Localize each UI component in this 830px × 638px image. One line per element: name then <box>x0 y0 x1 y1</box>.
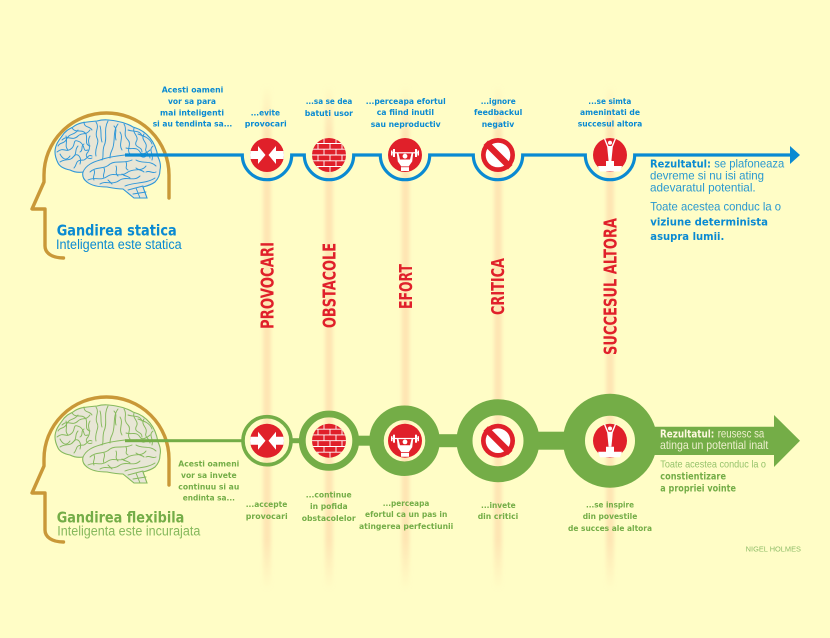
credit: NIGEL HOLMES <box>746 547 801 554</box>
caption: effort as a step: ...perceapa <box>383 498 429 508</box>
caption: learn from criticism: ...invete <box>481 500 516 510</box>
vertical label: CRITICA: CRITICA <box>489 258 509 315</box>
result text: fixed mindset: Toate acestea conduc la o <box>650 200 781 214</box>
caption: avoid challenges <box>245 108 287 129</box>
result text: fixed mindset: viziune determinista <box>650 216 768 229</box>
caption: persist through obstacles <box>302 490 357 523</box>
icon: figure on podium <box>593 424 627 458</box>
icon: weightlifter <box>388 424 422 458</box>
caption: effort is useless <box>366 96 446 129</box>
caption: threatened by success: ...se simta <box>588 96 631 106</box>
green growing timeline <box>125 405 800 477</box>
conclusion text: growth mindset: constientizare <box>660 472 726 483</box>
subheading: fixed mindset: Inteligenta este statica <box>56 237 182 252</box>
caption: avoid challenges: provocari <box>245 119 287 129</box>
heading: growth mindset: Gandirea flexibila <box>57 509 184 527</box>
caption: ignore feedback: feedbackul <box>474 107 522 117</box>
result text inside arrow: reusesc sa <box>718 427 765 441</box>
result text: fixed mindset: Rezultatul: <box>650 158 711 171</box>
icon: brick wall <box>312 138 346 172</box>
icon: prohibition sign <box>481 138 515 172</box>
result text: fixed mindset <box>650 157 785 243</box>
caption: effort is useless: ...perceapa efortul <box>366 96 446 106</box>
caption: effort is useless: sau neproductiv <box>371 119 441 129</box>
caption: give up easily <box>305 96 354 118</box>
caption: threatened by success: succesul altora <box>578 119 642 129</box>
vertical connecting stripes <box>263 85 614 590</box>
caption: give up easily: batuti usor <box>305 108 354 118</box>
caption: threatened by success: amenintati de <box>580 107 640 117</box>
caption: inspired by success: de succes ale altora <box>568 523 652 533</box>
caption: inspired by success <box>568 500 652 533</box>
caption: effort as a step: efortul ca un pas in <box>365 509 447 519</box>
caption: persist through obstacles: in pofida <box>310 501 348 511</box>
vertical label: SUCCESUL ALTORA: SUCCESUL ALTORA <box>601 218 621 355</box>
panel: growth mindset <box>32 397 801 554</box>
result text: fixed mindset: devreme si nu isi ating <box>650 169 764 183</box>
caption: learn from criticism <box>478 500 518 521</box>
result text inside arrow: atinga un potential inalt <box>660 438 769 452</box>
caption: effort as a step: atingerea perfectiunii <box>359 521 453 531</box>
icon: head outline, fixed mindset <box>32 113 169 258</box>
intro text: fixed mindset: Acesti oameni <box>162 85 223 95</box>
caption: inspired by success: ...se inspire <box>586 500 634 510</box>
intro text: fixed mindset: vor sa para <box>168 96 216 106</box>
caption: ignore feedback: ...ignore <box>481 96 516 106</box>
vertical label: OBSTACOLE: OBSTACOLE <box>320 243 340 328</box>
intro text: growth mindset: Acesti oameni <box>178 459 239 469</box>
caption: learn from criticism: din critici <box>478 511 518 521</box>
caption: ignore feedback <box>474 96 522 129</box>
result text inside arrow: Rezultatul: <box>660 428 714 441</box>
heading: fixed mindset: Gandirea statica <box>57 222 177 240</box>
intro text: growth mindset: endinta sa... <box>183 493 235 503</box>
icon: inward arrows <box>249 424 285 458</box>
caption: accept challenges: ...accepte <box>246 499 288 509</box>
intro text: fixed mindset: mai inteligenti <box>160 107 224 117</box>
caption: inspired by success: din povestile <box>583 511 638 521</box>
result text: fixed mindset: se plafoneaza <box>714 157 785 171</box>
blue timeline arrow <box>125 146 800 180</box>
caption: effort is useless: ca fiind inutil <box>377 107 434 117</box>
icon: figure on podium <box>593 138 627 172</box>
conclusion text: growth mindset: Toate acestea conduc la o <box>660 459 766 471</box>
caption: accept challenges <box>246 499 288 521</box>
caption: persist through obstacles: ...continue <box>306 490 352 500</box>
icon: blue brain <box>55 120 160 198</box>
intro text: fixed mindset: si au tendinta sa... <box>153 119 232 129</box>
result text: fixed mindset: adevaratul potential. <box>650 181 756 195</box>
conclusion text: growth mindset <box>660 459 766 495</box>
icon row: growth mindset <box>249 424 627 458</box>
caption: ignore feedback: negativ <box>482 119 515 129</box>
intro text: fixed mindset <box>153 85 232 129</box>
icon: weightlifter <box>388 138 422 172</box>
intro text: growth mindset: continuu si au <box>178 481 239 491</box>
caption: accept challenges: provocari <box>246 511 288 521</box>
icon: prohibition sign <box>481 424 515 458</box>
icon: inward arrows <box>249 138 285 172</box>
icon: green brain <box>55 405 160 483</box>
icon: head outline, growth mindset <box>32 397 169 542</box>
caption: threatened by success <box>578 96 642 129</box>
caption: avoid challenges: ...evite <box>251 108 280 118</box>
conclusion text: growth mindset: a propriei vointe <box>660 484 736 495</box>
vertical label: EFORT: EFORT <box>397 264 417 309</box>
caption: give up easily: ...sa se dea <box>306 96 352 106</box>
subheading: growth mindset: Inteligenta este incurajata <box>57 524 201 539</box>
intro text: growth mindset: vor sa invete <box>181 470 237 480</box>
caption: effort as a step <box>359 498 453 531</box>
intro text: growth mindset <box>178 459 239 503</box>
icon: brick wall <box>312 424 346 458</box>
panel: fixed mindset <box>32 85 800 258</box>
icon row: fixed mindset <box>249 138 627 172</box>
result text: fixed mindset: asupra lumii. <box>650 230 724 243</box>
vertical label: PROVOCARI: PROVOCARI <box>258 242 278 329</box>
result text inside arrow <box>660 427 769 452</box>
caption: persist through obstacles: obstacolelor <box>302 513 357 523</box>
